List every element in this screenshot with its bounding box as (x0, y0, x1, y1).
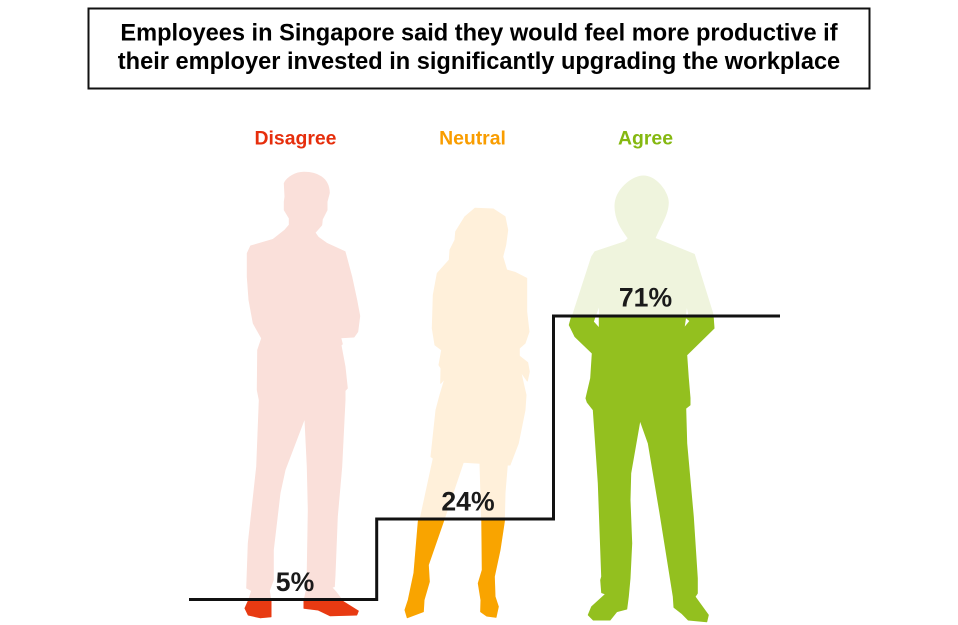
label: Agree: Agree (618, 128, 673, 150)
shoes, disagree filled part (244, 601, 359, 618)
title text: their employer invested in significantly upgrading the workplace (118, 49, 840, 75)
stepped line (189, 316, 780, 600)
figure: man, disagree silhouette (245, 172, 360, 618)
label: Disagree: Disagree (255, 128, 337, 150)
label: Neutral: Neutral (439, 128, 506, 150)
legs, neutral filled part (405, 510, 505, 618)
title text: Employees in Singapore said they would feel more productive if (120, 20, 838, 46)
title box (88, 8, 870, 88)
value: 24%: 24% (441, 486, 495, 516)
figure: woman, neutral silhouette (405, 208, 529, 618)
figure: man, agree silhouette (569, 176, 714, 622)
value: 71%: 71% (619, 282, 672, 312)
value: 5%: 5% (276, 567, 314, 597)
body, agree filled part (569, 310, 714, 622)
